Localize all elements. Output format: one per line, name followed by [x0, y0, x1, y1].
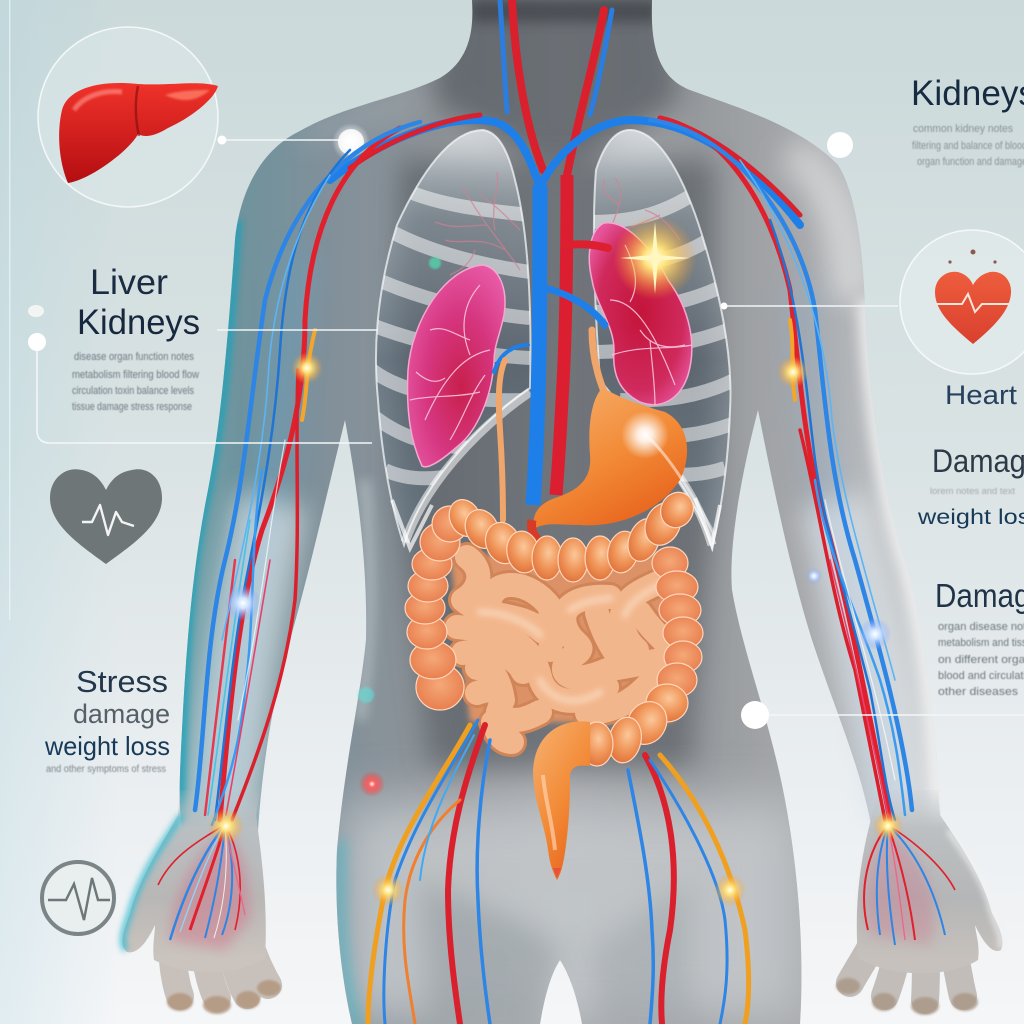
- lungs and ribcage: [372, 130, 738, 548]
- sigmoid colon: [533, 721, 590, 880]
- body silhouette: [180, 0, 942, 1024]
- body shading: [180, 0, 940, 1024]
- left callout: Liver Kidneys: [72, 263, 200, 413]
- large intestine beads: [405, 487, 703, 766]
- left callout: Liver Kidneys: Kidneys: [77, 303, 200, 342]
- leg vessels: right: [628, 755, 749, 1024]
- circle icon: liver: [38, 27, 218, 207]
- small description text: circulation toxin balance levels: [72, 385, 194, 397]
- leg vessels: left: [368, 720, 490, 1024]
- central arteries and veins: [330, 0, 800, 520]
- right callout: Kidneys: [911, 74, 1024, 168]
- left callout: Stress: weight loss: [44, 731, 170, 761]
- right label: Damage and weight loss: weight loss: [917, 506, 1024, 529]
- right hand: [836, 790, 1003, 1015]
- right label: Damage and weight loss: lorem notes and text: [930, 486, 1016, 496]
- small description text: [72, 351, 199, 413]
- connector: heart: [720, 302, 898, 310]
- small description text: disease organ function notes: [74, 351, 194, 363]
- right callout: Kidneys: common kidney notes: [913, 123, 1013, 135]
- icon: heart with pulse, grey: [50, 469, 162, 564]
- right label: Heart: Heart: [945, 380, 1018, 410]
- connector: damage: [741, 701, 1024, 729]
- right label: Damage and weight loss: [917, 443, 1024, 529]
- connector: liver to shoulder: [218, 123, 370, 161]
- small description text: metabolism filtering blood flow: [72, 369, 199, 381]
- left callout: Stress: damage: [73, 699, 170, 729]
- left callout: Stress: Stress: [76, 664, 168, 699]
- circle icon: heart: [900, 230, 1024, 374]
- arm glow: [218, 250, 892, 825]
- left kidney organ: [408, 265, 505, 467]
- liver organ: [59, 83, 218, 183]
- glow highlights: [208, 216, 903, 906]
- small intestine: [450, 555, 672, 742]
- connector: right shoulder: [827, 132, 853, 158]
- heading: Liver: [90, 263, 168, 302]
- arm vessels: left: [195, 122, 420, 825]
- small description text: tissue damage stress response: [72, 401, 192, 413]
- hand vessels: right: [864, 825, 955, 945]
- icon: pulse circle: [42, 862, 114, 934]
- right kidney organ: [589, 223, 692, 405]
- connector lines: left callout: [28, 305, 378, 443]
- hand vessels: left: [158, 825, 250, 950]
- right callout: Damage: other diseases: [938, 686, 1019, 698]
- left callout: Stress: [44, 664, 170, 775]
- left callout: Stress: and other symptoms of stress: [46, 764, 166, 775]
- arm vessels: right: [650, 118, 912, 820]
- stomach organ: [531, 387, 687, 545]
- left hand: [122, 790, 281, 1014]
- right callout: Damage: [935, 577, 1024, 698]
